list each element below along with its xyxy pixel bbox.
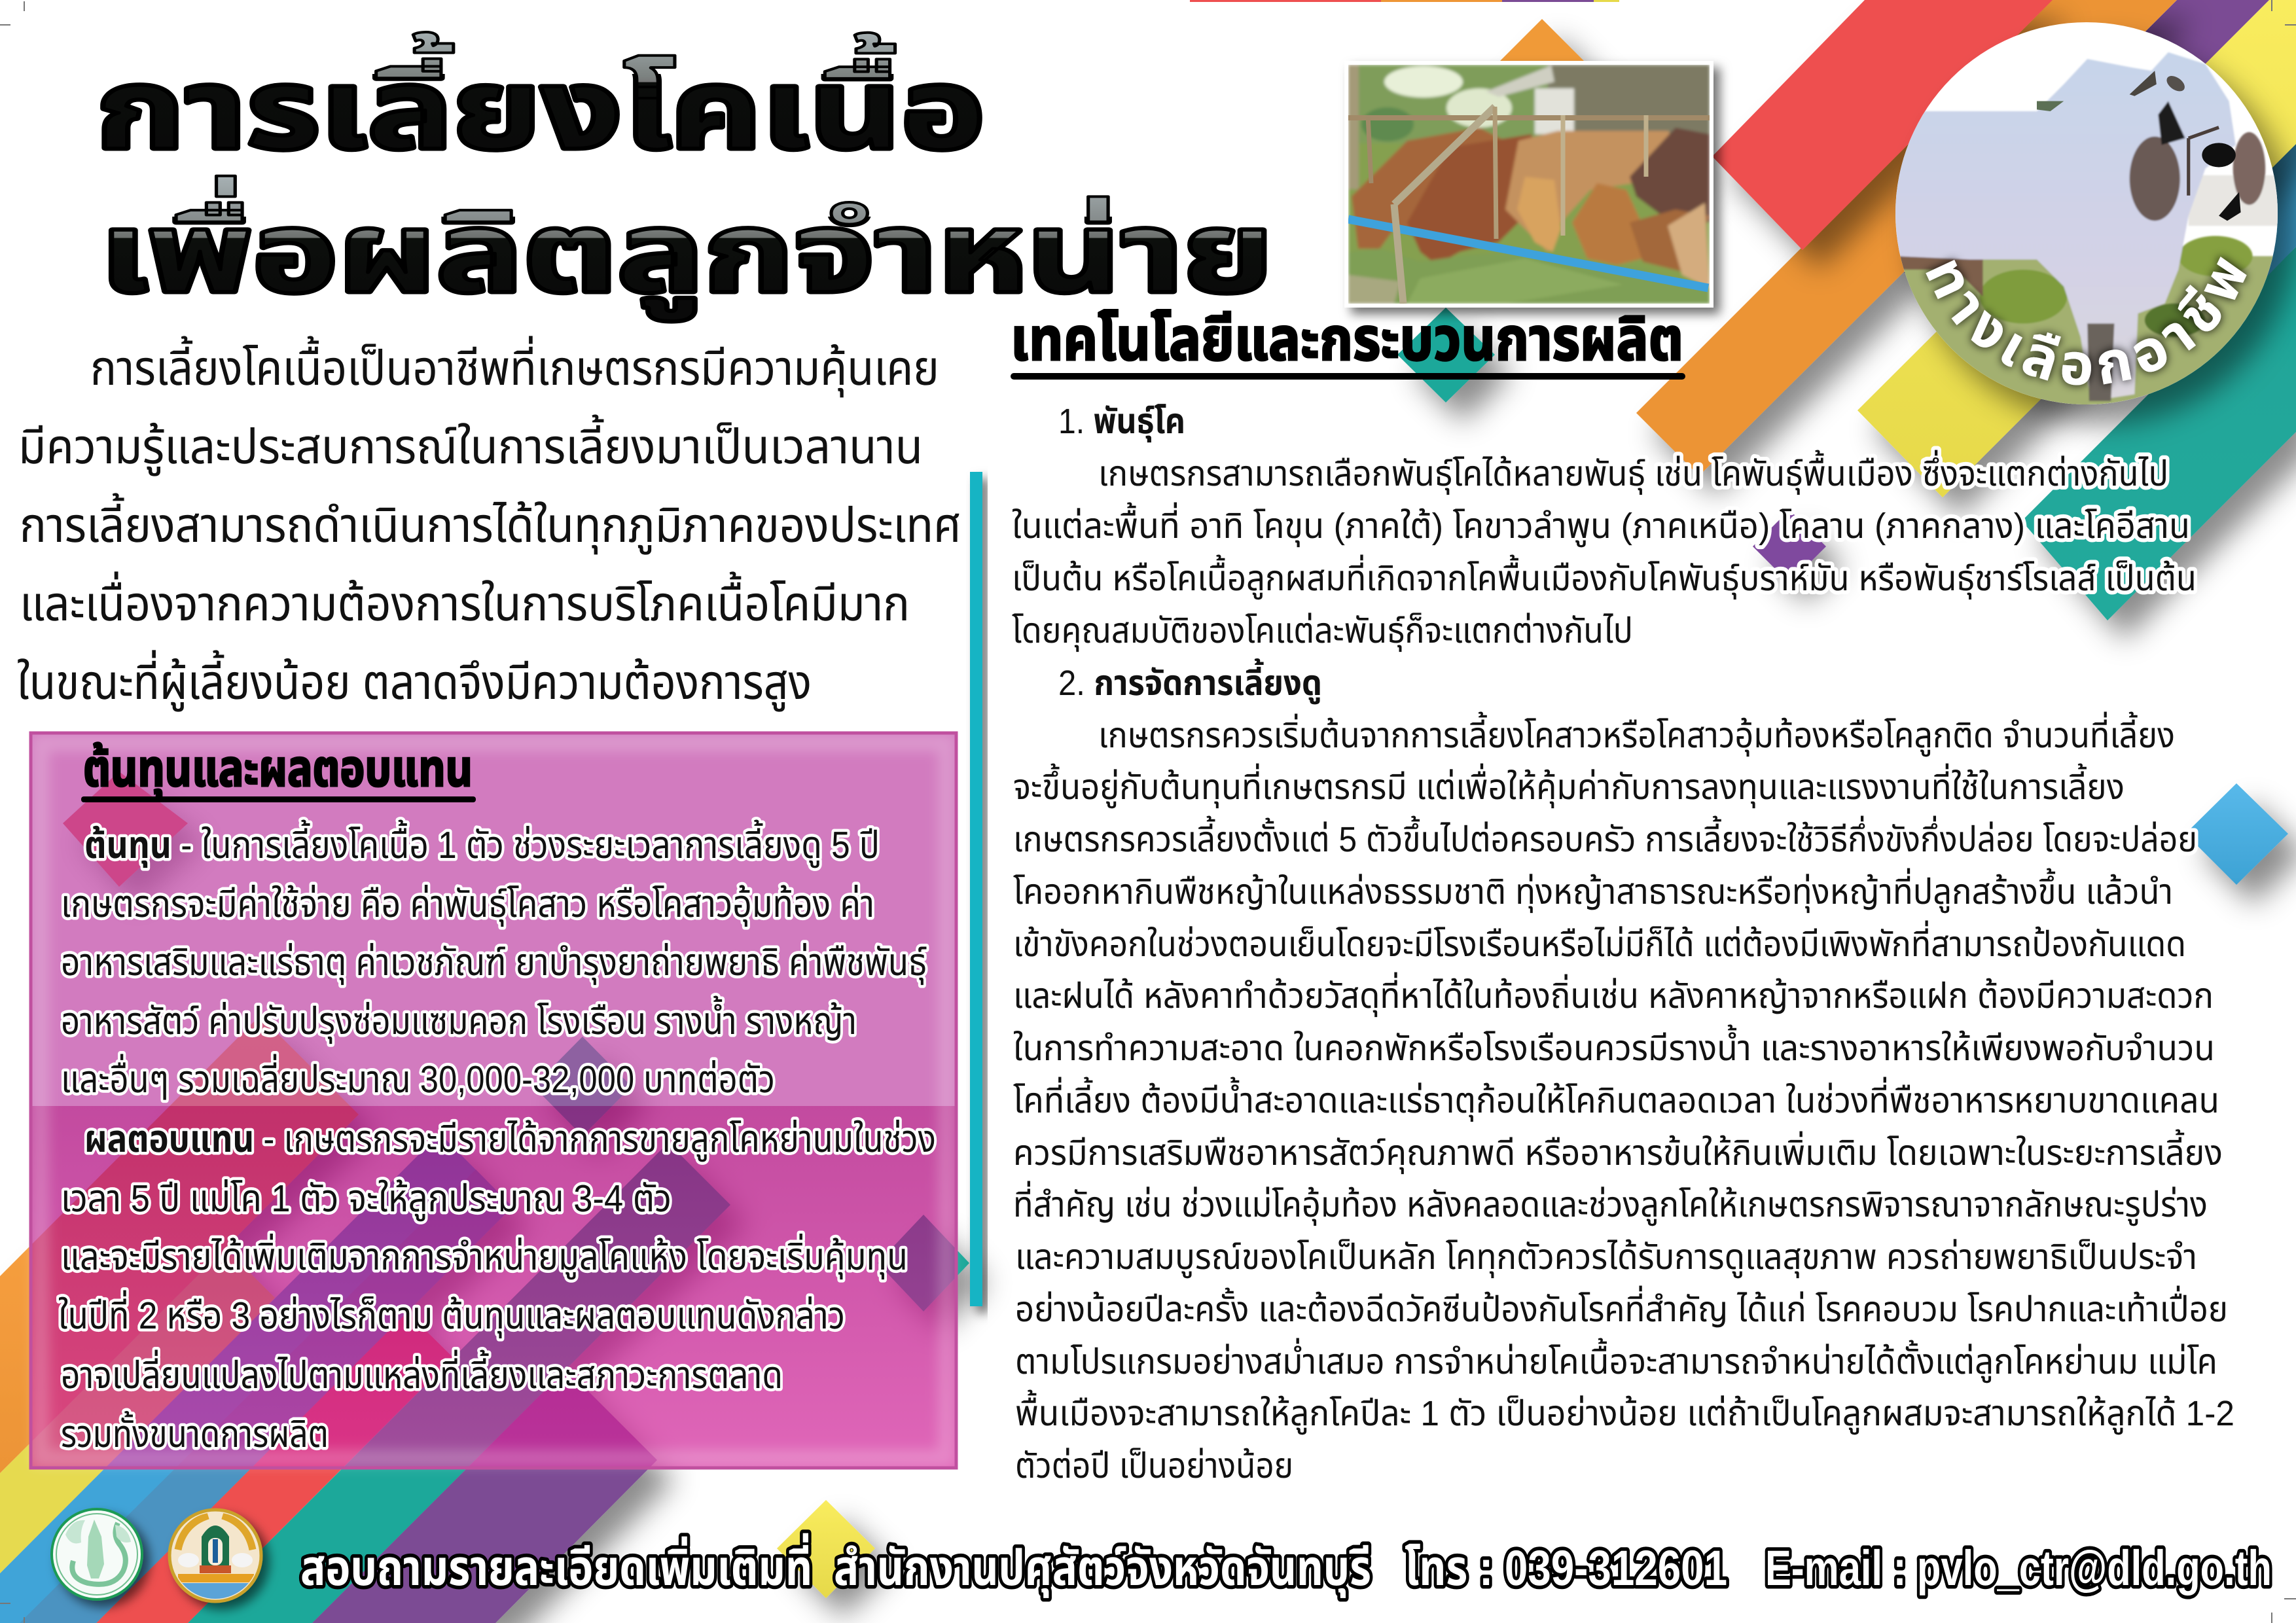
returns text: ในปีที่ 2 หรือ 3 อย่างไรก็ตาม ต้นทุนและผลตอบแทนดังกล่าว (58, 1290, 845, 1339)
section: cattle breeds: ในแต่ละพื้นที่ อาทิ โคขุน (ภาคใต้) โคขาวลำพูน (ภาคเหนือ) โคลาน (ภาคกลาง) และโคอีสาน (1012, 502, 2190, 548)
section: cattle breeds: เกษตรกรสามารถเลือกพันธุ์โคได้หลายพันธุ์ เช่น โคพันธุ์พื้นเมือง ซึ่งจะแตกต่างกันไป (1098, 450, 2168, 495)
section: husbandry management: จะขึ้นอยู่กับต้นทุนที่เกษตรกรมี แต่เพื่อให้คุ้มค่ากับการลงทุนและแรงงานที่ใช้ในการเลี้ยง (1013, 763, 2125, 809)
section: cattle breeds: โดยคุณสมบัติของโคแต่ละพันธุ์ก็จะแตกต่างกันไป (1012, 611, 1633, 652)
section: cattle breeds: เป็นต้น หรือโคเนื้อลูกผสมที่เกิดจากโคพื้นเมืองกับโคพันธุ์บราห์มัน หรือพันธุ์ชาร์โรเลส์ เป็นต้น (1012, 554, 2197, 600)
title heavy underlay: เพื่อผลิตลูกจำหน่าย (100, 175, 1273, 321)
returns text (58, 1118, 936, 1455)
returns text: รวมทั้งขนาดการผลิต (61, 1410, 329, 1455)
title lines (96, 31, 1273, 321)
section: husbandry management: โคออกหากินพืชหญ้าในแหล่งธรรมชาติ ทุ่งหญ้าสาธารณะหรือทุ่งหญ้าที่ปลูกสร้างขึ้น แล้วนำ (1013, 868, 2173, 914)
section: husbandry management: เกษตรกรควรเริ่มต้นจากการเลี้ยงโคสาวหรือโคสาวอุ้มท้องหรือโคลูกติด จำนวนที่เลี้ยง (1098, 711, 2175, 757)
logo: provincial seal (gold) (170, 1510, 262, 1603)
logo: department seal (green) (52, 1509, 142, 1599)
circular photo: white Brahman cow (1894, 22, 2296, 435)
panel heading: ต้นทุนและผลตอบแทน (83, 740, 473, 800)
title lines: เพื่อผลิตลูกจำหน่าย (100, 175, 1273, 321)
section: husbandry management: โคที่เลี้ยง ต้องมีน้ำสะอาดและแร่ธาตุก้อนให้โคกินตลอดเวลา ในช่วงที่พืชอาหารหยาบขาดแคลน (1013, 1077, 2219, 1122)
section: husbandry management: ตัวต่อปี เป็นอย่างน้อย (1015, 1446, 1293, 1486)
costs text: อาหารเสริมและแร่ธาตุ ค่าเวชภัณฑ์ ยาบำรุงยาถ่ายพยาธิ ค่าพืชพันธุ์ (61, 941, 927, 986)
section: husbandry management: พื้นเมืองจะสามารถให้ลูกโคปีละ 1 ตัว เป็นอย่างน้อย แต่ถ้าเป็นโคลูกผสมจะสามารถให้ลูกได้ 1-2 (1015, 1389, 2234, 1435)
section heading: technology and production: เทคโนโลยีและกระบวนการผลิต (1011, 306, 1683, 373)
title heavy underlay (96, 31, 1273, 321)
cyan vertical divider bar (970, 472, 982, 1306)
introduction paragraph: และเนื่องจากความต้องการในการบริโภคเนื้อโคมีมาก (20, 571, 910, 631)
footer contact line: สอบถามรายละเอียดเพิ่มเติมที่ (300, 1533, 812, 1596)
photo: cows feeding in a pen (1344, 61, 1713, 308)
section: husbandry management: เกษตรกรควรเลี้ยงตั้งแต่ 5 ตัวขึ้นไปต่อครอบครัว การเลี้ยงจะใช้วิธีกึ่งขังกึ่งปล่อย โดยจะปล่อย (1013, 815, 2197, 859)
panel: costs and returns (31, 733, 956, 1468)
section: husbandry management: อย่างน้อยปีละครั้ง และต้องฉีดวัคซีนป้องกันโรคที่สำคัญ ได้แก่ โรคคอบวม โรคปากและเท้าเปื่อย (1015, 1285, 2228, 1329)
section: husbandry management: ตามโปรแกรมอย่างสม่ำเสมอ การจำหน่ายโคเนื้อจะสามารถจำหน่ายได้ตั้งแต่ลูกโคหย่านม แม่โค (1015, 1338, 2217, 1383)
footer contact line: สำนักงานปศุสัตว์จังหวัดจันทบุรี (834, 1541, 1371, 1598)
section: husbandry management: และฝนได้ หลังคาทำด้วยวัสดุที่หาได้ในท้องถิ่นเช่น หลังคาหญ้าจากหรือแฝก ต้องมีความสะดวก (1013, 972, 2214, 1018)
section: cattle breeds (1012, 402, 2197, 652)
top colour strip (1190, 0, 1619, 2)
introduction paragraph: ในขณะที่ผู้เลี้ยงน้อย ตลาดจึงมีความต้องการสูง (17, 650, 812, 712)
section: husbandry management: ในการทำความสะอาด ในคอกพักหรือโรงเรือนควรมีรางน้ำ และรางอาหารให้เพียงพอกับจำนวน (1013, 1024, 2215, 1068)
section: husbandry management (1013, 658, 2234, 1486)
returns text: อาจเปลี่ยนแปลงไปตามแหล่งที่เลี้ยงและสภาวะการตลาด (61, 1349, 783, 1397)
returns text: และจะมีรายได้เพิ่มเติมจากการจำหน่ายมูลโคแห้ง โดยจะเริ่มคุ้มทุน (61, 1233, 908, 1280)
introduction paragraph: การเลี้ยงสามารถดำเนินการได้ในทุกภูมิภาคของประเทศ (20, 493, 961, 555)
returns text: เวลา 5 ปี แม่โค 1 ตัว จะให้ลูกประมาณ 3-4 ตัว (61, 1177, 672, 1222)
introduction paragraph: มีความรู้และประสบการณ์ในการเลี้ยงมาเป็นเวลานาน (18, 414, 923, 476)
costs text: ต้นทุน - ในการเลี้ยงโคเนื้อ 1 ตัว ช่วงระยะเวลาการเลี้ยงดู 5 ปี (84, 819, 880, 868)
returns text: ผลตอบแทน - เกษตรกรจะมีรายได้จากการขายลูกโคหย่านมในช่วง (84, 1118, 936, 1162)
costs text: อาหารสัตว์ ค่าปรับปรุงซ่อมแซมคอก โรงเรือน รางน้ำ รางหญ้า (61, 995, 857, 1044)
section: husbandry management: ควรมีการเสริมพืชอาหารสัตว์คุณภาพดี หรืออาหารข้นให้กินเพิ่มเติม โดยเฉพาะในระยะการเลี้ยง (1013, 1129, 2223, 1175)
decorative bands: top right (1636, 0, 2296, 620)
introduction paragraph: การเลี้ยงโคเนื้อเป็นอาชีพที่เกษตรกรมีความคุ้นเคย (90, 336, 939, 398)
section: husbandry management: 2. การจัดการเลี้ยงดู (1058, 658, 1322, 705)
section: cattle breeds: 1. พันธุ์โค (1058, 402, 1185, 443)
title lines: การเลี้ยงโคเนื้อ (96, 31, 985, 172)
costs text: และอื่นๆ รวมเฉลี่ยประมาณ 30,000-32,000 บาทต่อตัว (61, 1054, 775, 1101)
section: husbandry management: ที่สำคัญ เช่น ช่วงแม่โคอุ้มท้อง หลังคลอดและช่วงลูกโคให้เกษตรกรพิจารณาจากลักษณะรูปร่าง (1013, 1181, 2208, 1226)
decorative bands: bottom left (0, 1016, 730, 1623)
footer contact line (300, 1533, 2272, 1598)
curved caption: ทางเลือกอาชีพ (1921, 253, 2251, 391)
costs text: เกษตรกรจะมีค่าใช้จ่าย คือ ค่าพันธุ์โคสาว หรือโคสาวอุ้มท้อง ค่า (61, 883, 874, 927)
main title (96, 31, 1273, 321)
costs text (61, 819, 927, 1101)
section: husbandry management: และความสมบูรณ์ของโคเป็นหลัก โคทุกตัวควรได้รับการดูแลสุขภาพ ควรถ่ายพยาธิเป็นประจำ (1015, 1238, 2197, 1279)
title heavy underlay: การเลี้ยงโคเนื้อ (96, 31, 985, 172)
footer contact line: โทร : 039-312601 (1405, 1541, 1727, 1596)
introduction paragraph (17, 336, 961, 712)
section: husbandry management: เข้าขังคอกในช่วงตอนเย็นโดยจะมีโรงเรือนหรือไม่มีก็ได้ แต่ต้องมีเพิงพักที่สามารถป้องกันแดด (1013, 920, 2186, 964)
